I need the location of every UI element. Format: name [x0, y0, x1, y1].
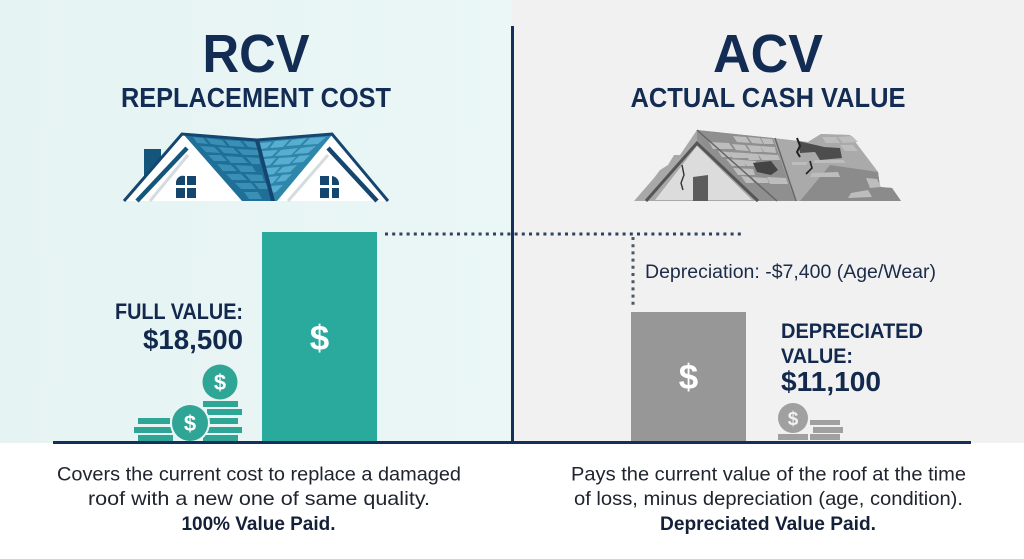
chart: ACV bar [631, 312, 746, 442]
shingles: right slope [260, 137, 326, 193]
right gable inner rafter [328, 148, 377, 201]
label: full value: FULL VALUE: [115, 299, 243, 324]
heading: ACV: ACTUAL CASH VALUE [630, 82, 906, 113]
tiles [709, 136, 881, 198]
heading: ACV: ACV [713, 25, 823, 84]
text: RCV description: Covers the current cost to replace a damaged [57, 464, 461, 486]
left gable inner rafter [137, 148, 187, 201]
label: depreciated value: $11,100 [781, 366, 881, 397]
icon: gray coin stack: $ [788, 409, 799, 430]
connector: dotted level line [385, 232, 745, 236]
roof outline [124, 134, 388, 201]
text: ACV description [571, 464, 966, 535]
gable shadows [150, 155, 188, 201]
text: RCV description: 100% Value Paid. [182, 513, 336, 535]
connector: dotted depreciation drop [632, 237, 634, 306]
panel: ACV background [512, 0, 1024, 443]
heading: RCV: REPLACEMENT COST [121, 82, 391, 113]
chart: RCV bar [262, 232, 377, 442]
divider: vertical center line [511, 26, 514, 443]
label: depreciated value [781, 319, 923, 397]
heading: ACV [630, 25, 906, 113]
label: full value [115, 299, 243, 355]
chart: ACV bar: $ [679, 358, 698, 397]
chart: RCV bar: $ [310, 319, 329, 358]
panel: RCV background [0, 0, 512, 443]
icon: teal coin stacks: $ [214, 370, 226, 395]
text: RCV description [57, 464, 461, 535]
text: ACV description: Depreciated Value Paid. [660, 513, 876, 535]
axis: baseline [53, 441, 971, 444]
icon: damaged house roof [634, 130, 901, 201]
icon: gray coin stack [778, 403, 843, 440]
roof valley [255, 140, 275, 201]
text: ACV description: of loss, minus depreciation (age, condition). [574, 488, 963, 510]
heading: RCV: RCV [202, 25, 310, 84]
shingles: left slope [193, 137, 268, 199]
icon: new house roof [123, 133, 389, 201]
heading: RCV [121, 25, 391, 113]
label: depreciated value: VALUE: [781, 344, 853, 368]
panel: footer background [0, 443, 1024, 559]
text: ACV description: Pays the current value of the roof at the time [571, 464, 966, 486]
windows [176, 176, 339, 198]
label: full value: $18,500 [143, 324, 243, 355]
icon: teal coin stacks [134, 364, 242, 443]
label: depreciated value: DEPRECIATED [781, 319, 923, 343]
label: depreciation: Depreciation: -$7,400 (Age/Wear) [645, 262, 936, 283]
text: RCV description: roof with a new one of same quality. [88, 488, 430, 510]
icon: teal coin stacks: $ [184, 411, 196, 436]
